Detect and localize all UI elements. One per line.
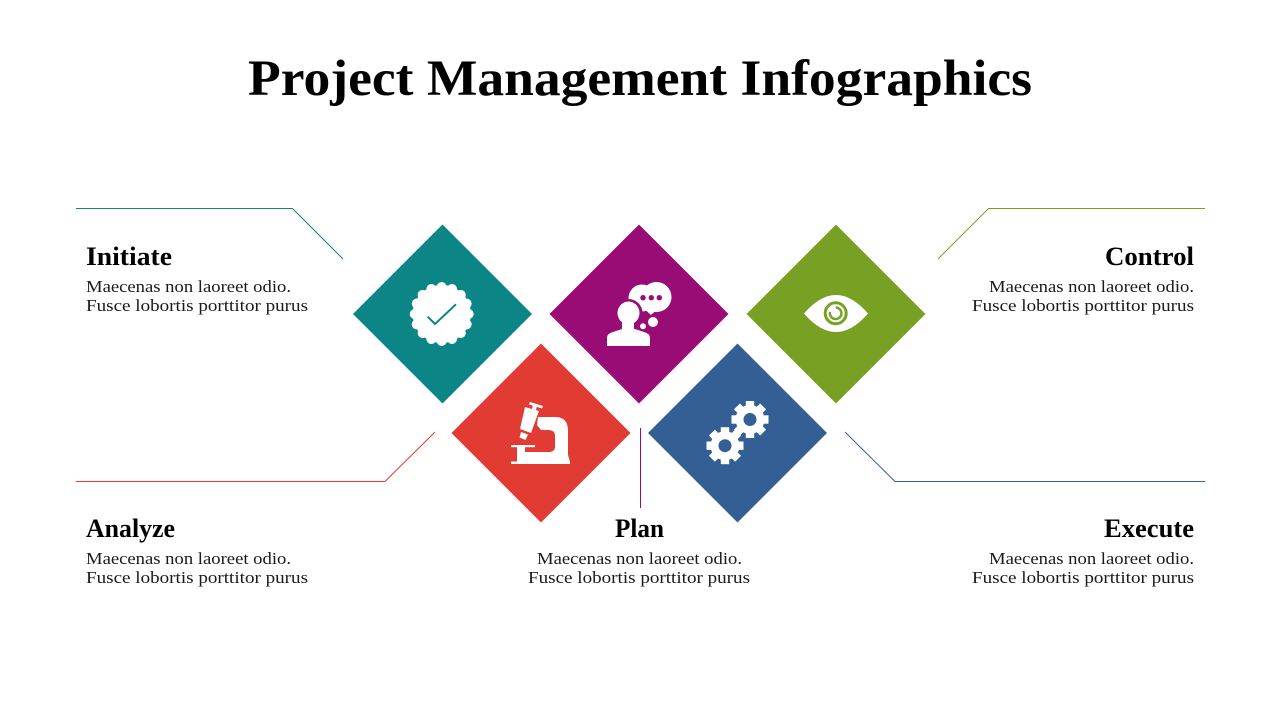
heading: execute: Execute: [1104, 514, 1194, 543]
panel: control: [938, 208, 1205, 315]
heading: analyze: Analyze: [86, 514, 175, 543]
panel: plan: [528, 428, 750, 587]
diamond: blue: [648, 344, 827, 522]
connector: control: [938, 208, 1205, 259]
connector: execute: [845, 432, 1205, 482]
diamond: red: [452, 344, 630, 522]
connector: analyze: [76, 432, 435, 482]
text: control: Fusce lobortis porttitor purus: [972, 296, 1194, 315]
icon: badge with check: [410, 282, 474, 346]
heading: control: Control: [1105, 242, 1194, 271]
panel: initiate: [76, 208, 343, 315]
text: initiate: Fusce lobortis porttitor purus: [86, 296, 308, 315]
text: initiate: Maecenas non laoreet odio.: [86, 277, 291, 296]
panel: execute: [845, 432, 1205, 587]
text: analyze: Fusce lobortis porttitor purus: [86, 568, 308, 587]
icon: microscope: [511, 402, 570, 464]
panel: analyze: [76, 432, 435, 587]
icon: gears: [706, 401, 768, 464]
diamond: purple: [550, 224, 728, 404]
icon: eye: [804, 295, 868, 332]
connector: plan: [640, 428, 642, 508]
connector: initiate: [76, 208, 343, 259]
text: control: Maecenas non laoreet odio.: [989, 277, 1194, 296]
text: plan: Fusce lobortis porttitor purus: [528, 568, 750, 587]
heading: initiate: Initiate: [86, 242, 172, 271]
heading: plan: Plan: [615, 514, 665, 543]
diamond: teal: [353, 224, 532, 404]
text: analyze: Maecenas non laoreet odio.: [86, 549, 291, 568]
diamond: green: [746, 224, 926, 404]
text: execute: Fusce lobortis porttitor purus: [972, 568, 1194, 587]
title: Project Management Infographics: [248, 51, 1032, 107]
text: execute: Maecenas non laoreet odio.: [989, 549, 1194, 568]
text: plan: Maecenas non laoreet odio.: [537, 549, 742, 568]
icon: person with thought bubbles: [607, 282, 672, 346]
